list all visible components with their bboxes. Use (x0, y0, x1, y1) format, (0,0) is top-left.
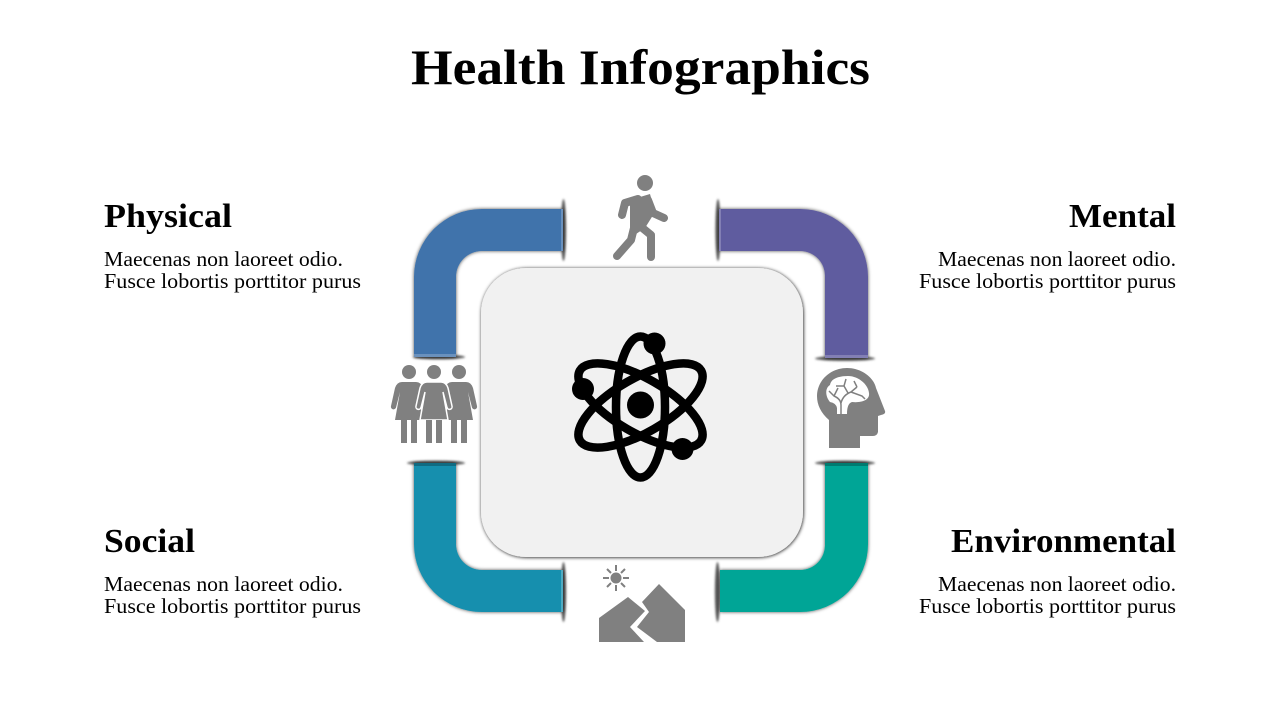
panel: centre rounded square (481, 268, 803, 557)
body: social (104, 572, 361, 618)
arc: teal bottom-left (407, 461, 566, 622)
heading: social: Social (104, 523, 195, 560)
heading: mental: Mental (1069, 198, 1176, 235)
panel: social text (104, 523, 361, 618)
body: environmental (919, 572, 1176, 618)
panel: mental text (919, 198, 1176, 293)
body: social: Fusce lobortis porttitor purus (104, 594, 361, 618)
body: environmental: Maecenas non laoreet odio. (938, 572, 1176, 596)
body: environmental: Fusce lobortis porttitor purus (919, 594, 1176, 618)
body: mental (919, 247, 1176, 293)
arc: green bottom-right (715, 461, 875, 622)
icon: group of women (391, 365, 477, 443)
body: physical: Maecenas non laoreet odio. (104, 247, 343, 271)
icon: sun and mountains (599, 565, 685, 642)
body: physical (104, 247, 361, 293)
body: social: Maecenas non laoreet odio. (104, 572, 343, 596)
heading: physical: Physical (104, 198, 232, 235)
body: physical: Fusce lobortis porttitor purus (104, 269, 361, 293)
arc: purple top-right (715, 199, 875, 361)
heading: environmental: Environmental (951, 523, 1176, 560)
icon: head with brain (817, 368, 885, 448)
body: mental: Maecenas non laoreet odio. (938, 247, 1176, 271)
icon: walking person (617, 175, 664, 257)
icon: atom (566, 332, 715, 478)
arc: blue top-left (413, 199, 566, 359)
title: Health Infographics (411, 39, 870, 95)
panel: physical text (104, 198, 361, 293)
body: mental: Fusce lobortis porttitor purus (919, 269, 1176, 293)
panel: environmental text (919, 523, 1176, 618)
